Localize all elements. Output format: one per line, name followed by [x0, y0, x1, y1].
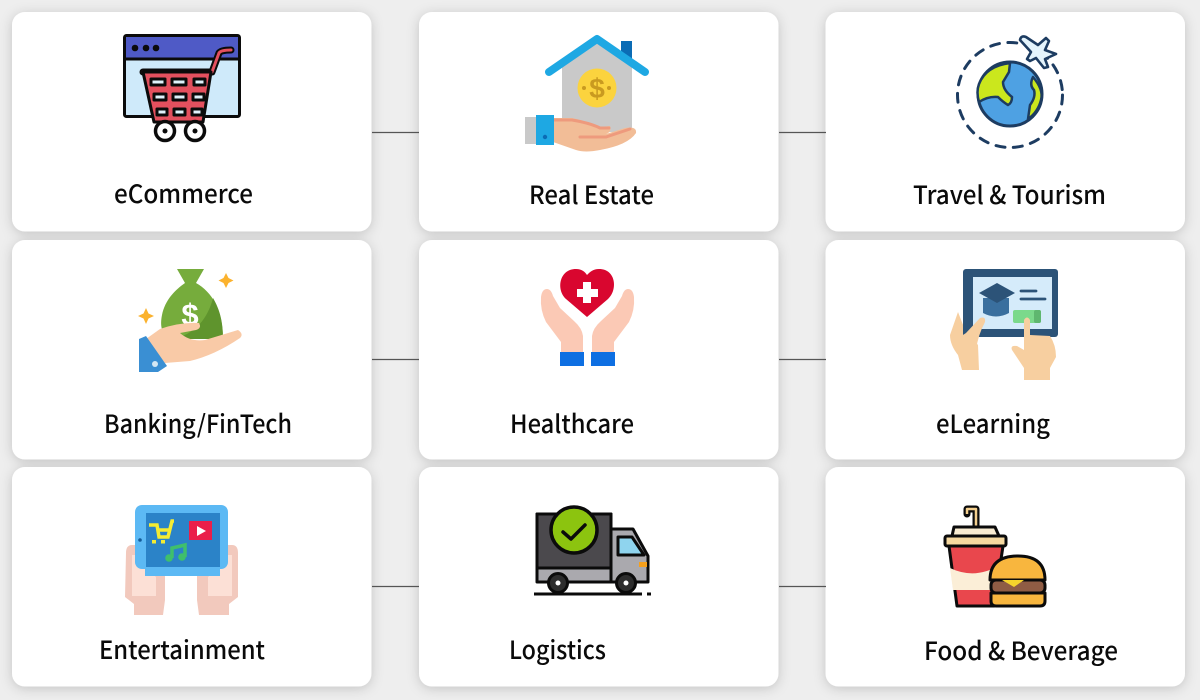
panel: Real Estate — [525, 39, 654, 212]
icon: heart in two hands — [541, 269, 634, 366]
label: Entertainment: Entertainment — [99, 631, 265, 667]
label: eCommerce: eCommerce — [114, 175, 253, 211]
icon: shopping cart on browser window — [124, 36, 240, 140]
label: Real Estate: Real Estate — [529, 176, 654, 212]
label: Healthcare: Healthcare — [510, 405, 634, 441]
icon: soda cup and burger — [945, 509, 1045, 606]
icon: tablet held with media symbols — [125, 505, 238, 615]
panel: eCommerce — [114, 36, 253, 211]
panel: Banking/FinTech — [104, 269, 292, 441]
panel: eLearning — [936, 269, 1058, 441]
panel: Logistics — [509, 507, 651, 667]
icon: house on a hand — [525, 39, 645, 152]
icon: delivery truck with check mark — [534, 507, 651, 594]
icon: tablet with hands — [950, 269, 1058, 380]
label: eLearning: eLearning — [936, 405, 1051, 441]
label: Logistics: Logistics — [509, 631, 606, 667]
icon: house on a hand: $ — [589, 73, 605, 104]
panel: Travel & Tourism — [913, 36, 1106, 212]
label: Banking/FinTech: Banking/FinTech — [104, 405, 292, 441]
panel: Healthcare — [510, 269, 634, 441]
icon: money bag on a hand — [138, 269, 242, 372]
panel: Entertainment — [99, 505, 265, 667]
panel: Food & Beverage — [924, 509, 1118, 668]
icon: globe with plane — [958, 36, 1062, 147]
label: Food & Beverage: Food & Beverage — [924, 632, 1118, 668]
label: Travel & Tourism: Travel & Tourism — [913, 176, 1106, 212]
icon: money bag on a hand: $ — [181, 297, 199, 332]
